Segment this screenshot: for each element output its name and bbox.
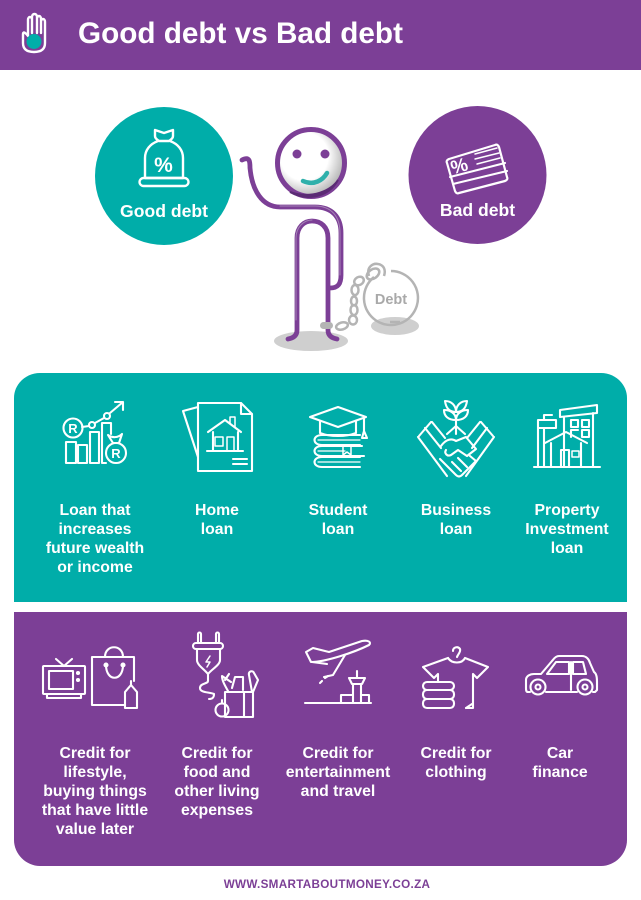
- panel: good debt: [14, 373, 627, 602]
- label: loan that increases future wealth or income: or income: [57, 559, 133, 576]
- label: credit for entertainment and travel: Credit for: [302, 745, 374, 762]
- icon: growth chart: R: [111, 446, 121, 461]
- ball and chain: [320, 264, 418, 331]
- label: loan that increases future wealth or income: future wealth: [46, 540, 144, 557]
- label: credit for entertainment and travel: and travel: [301, 783, 375, 800]
- label: property investment loan: Investment: [525, 521, 609, 538]
- good debt circle: [95, 107, 233, 245]
- panel: bad debt: [14, 612, 627, 866]
- label: loan that increases future wealth or income: Loan that: [59, 502, 131, 519]
- icon: credit card: %: [448, 154, 471, 179]
- label: credit for food and other living expenses: food and: [184, 764, 250, 781]
- label: home loan: loan: [201, 521, 233, 538]
- label: credit for lifestyle: lifestyle,: [63, 764, 127, 781]
- icon: graduation cap on books: [310, 407, 367, 467]
- label: bad debt: Bad debt: [440, 200, 515, 220]
- label: loan that increases future wealth or income: increases: [59, 521, 132, 538]
- label: car finance: finance: [532, 764, 588, 781]
- label: credit for clothing: clothing: [425, 764, 487, 781]
- label: property investment loan: Property: [535, 502, 600, 519]
- label: property investment loan: loan: [551, 540, 583, 557]
- label: student loan: Student: [309, 502, 368, 519]
- label: good debt: Good debt: [120, 201, 208, 221]
- icon: car: [526, 656, 597, 694]
- icon: money bag: %: [154, 154, 173, 177]
- icon: handshake with plant: [418, 401, 494, 476]
- icon: plug and groceries: [193, 632, 258, 717]
- title: Good debt vs Bad debt: [78, 17, 403, 50]
- label: car finance: Car: [547, 745, 573, 762]
- bad debt circle: [408, 106, 546, 244]
- label: credit for lifestyle: that have little: [42, 802, 148, 819]
- character with ball and chain: [242, 130, 419, 351]
- label: credit for lifestyle: value later: [56, 821, 134, 838]
- head: [278, 130, 344, 197]
- label: business loan: loan: [440, 521, 472, 538]
- icon: growth chart: [64, 402, 126, 463]
- label: business loan: Business: [421, 502, 491, 519]
- label: credit for food and other living expenses: Credit for: [181, 745, 253, 762]
- header banner: [0, 0, 641, 70]
- label: credit for clothing: Credit for: [420, 745, 492, 762]
- arm: [242, 159, 341, 288]
- shadows: [274, 317, 419, 351]
- icon: tv and shopping bag: [43, 647, 137, 708]
- icon: plane and control tower: [305, 641, 371, 703]
- legs: [288, 220, 337, 339]
- footer url: WWW.SMARTABOUTMONEY.CO.ZA: [224, 878, 431, 891]
- icon: buildings and house: [534, 405, 600, 467]
- ball and chain: Debt: [375, 292, 407, 308]
- label: credit for food and other living expenses: other living: [174, 783, 260, 800]
- icon: t-shirt and folded clothes: [423, 647, 488, 708]
- label: home loan: Home: [195, 502, 239, 519]
- icon: hand logo: [23, 14, 45, 52]
- icon: growth chart: R: [68, 421, 78, 436]
- label: credit for lifestyle: Credit for: [59, 745, 131, 762]
- label: credit for entertainment and travel: entertainment: [286, 764, 391, 781]
- label: student loan: loan: [322, 521, 354, 538]
- icon: house document: [183, 403, 252, 471]
- label: credit for lifestyle: buying things: [43, 783, 147, 800]
- label: credit for food and other living expenses: expenses: [181, 802, 253, 819]
